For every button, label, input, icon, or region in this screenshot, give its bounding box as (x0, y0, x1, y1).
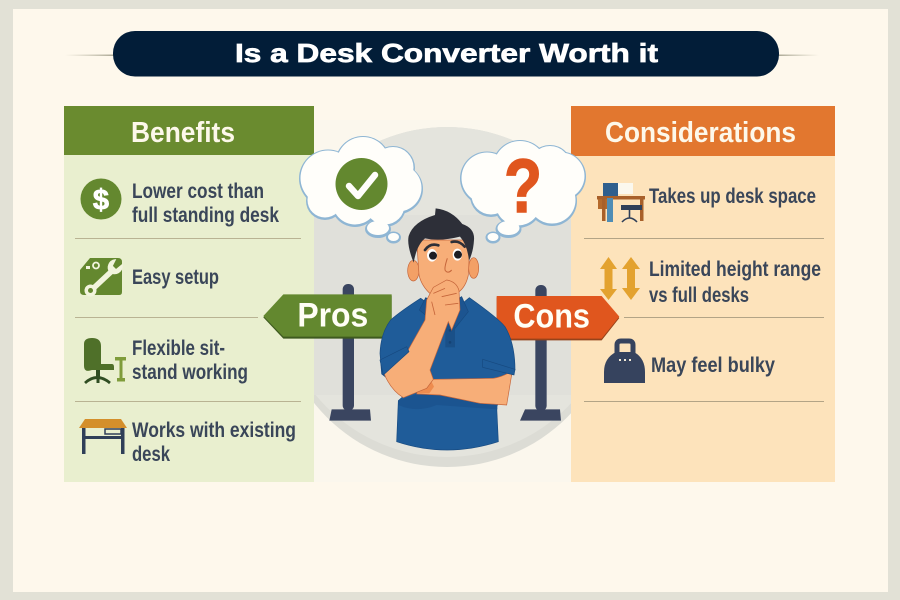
hair (408, 208, 474, 263)
cons signpost (497, 285, 619, 421)
shirt placket and buttons (445, 321, 455, 347)
heading: considerations (571, 106, 835, 156)
eyes and brows (425, 242, 465, 272)
benefit: easy setup: Easy setup (132, 266, 219, 289)
benefit: works with existing desk (132, 419, 296, 466)
icon: weight (604, 341, 645, 383)
consideration: desk space: Takes up desk space (649, 185, 816, 208)
icon: dollar coin (80, 178, 122, 220)
heading: benefits (64, 106, 314, 155)
title banner: Is a Desk Converter Worth it (235, 38, 658, 68)
icon: chair (84, 338, 126, 383)
heading: benefits: Benefits (131, 117, 235, 149)
consideration: bulky: May feel bulky (651, 354, 775, 377)
consideration: limited height: Limited height range (649, 258, 821, 281)
icon: check mark (336, 158, 388, 210)
finger lines (432, 288, 458, 315)
collar (419, 297, 468, 328)
benefit: lower cost: Lower cost than (132, 180, 264, 203)
benefit: lower cost: full standing desk (132, 204, 279, 227)
benefit: works with existing desk: desk (132, 443, 170, 466)
icon: desk (79, 419, 127, 454)
icon: question mark: ? (504, 144, 542, 229)
person thinking (380, 208, 515, 450)
signposts and person, drawn at 3x (263, 208, 619, 450)
benefit: works with existing desk: Works with existing (132, 419, 296, 442)
shirt (380, 298, 515, 450)
right sleeve (483, 359, 515, 375)
consideration: limited height: vs full desks (649, 284, 749, 307)
face (417, 240, 470, 296)
raised arm and hand (384, 280, 460, 398)
consideration: limited height (649, 258, 821, 307)
benefit: flexible sit-stand: stand working (132, 361, 248, 384)
ears (408, 258, 479, 281)
icon: height arrows (600, 257, 640, 300)
panel: benefits (64, 106, 314, 482)
pros signpost (263, 284, 392, 421)
central backdrop circle (314, 127, 571, 467)
thought bubble: question (460, 140, 586, 244)
benefit: lower cost (132, 180, 279, 227)
icon: dollar coin: $ (93, 184, 109, 216)
shirt shading (398, 394, 497, 409)
thought bubble: check (299, 136, 423, 244)
title banner (113, 31, 779, 76)
icon: cluttered desk (597, 183, 645, 222)
folded arm (417, 371, 512, 405)
benefit: flexible sit-stand (132, 337, 248, 384)
icon: wrench (80, 258, 122, 296)
pros signpost: Pros (297, 297, 368, 335)
cons signpost: Cons (513, 297, 590, 335)
benefit: flexible sit-stand: Flexible sit- (132, 337, 225, 360)
left sleeve (380, 347, 409, 375)
panel: considerations (571, 106, 835, 482)
heading: considerations: Considerations (605, 117, 796, 149)
